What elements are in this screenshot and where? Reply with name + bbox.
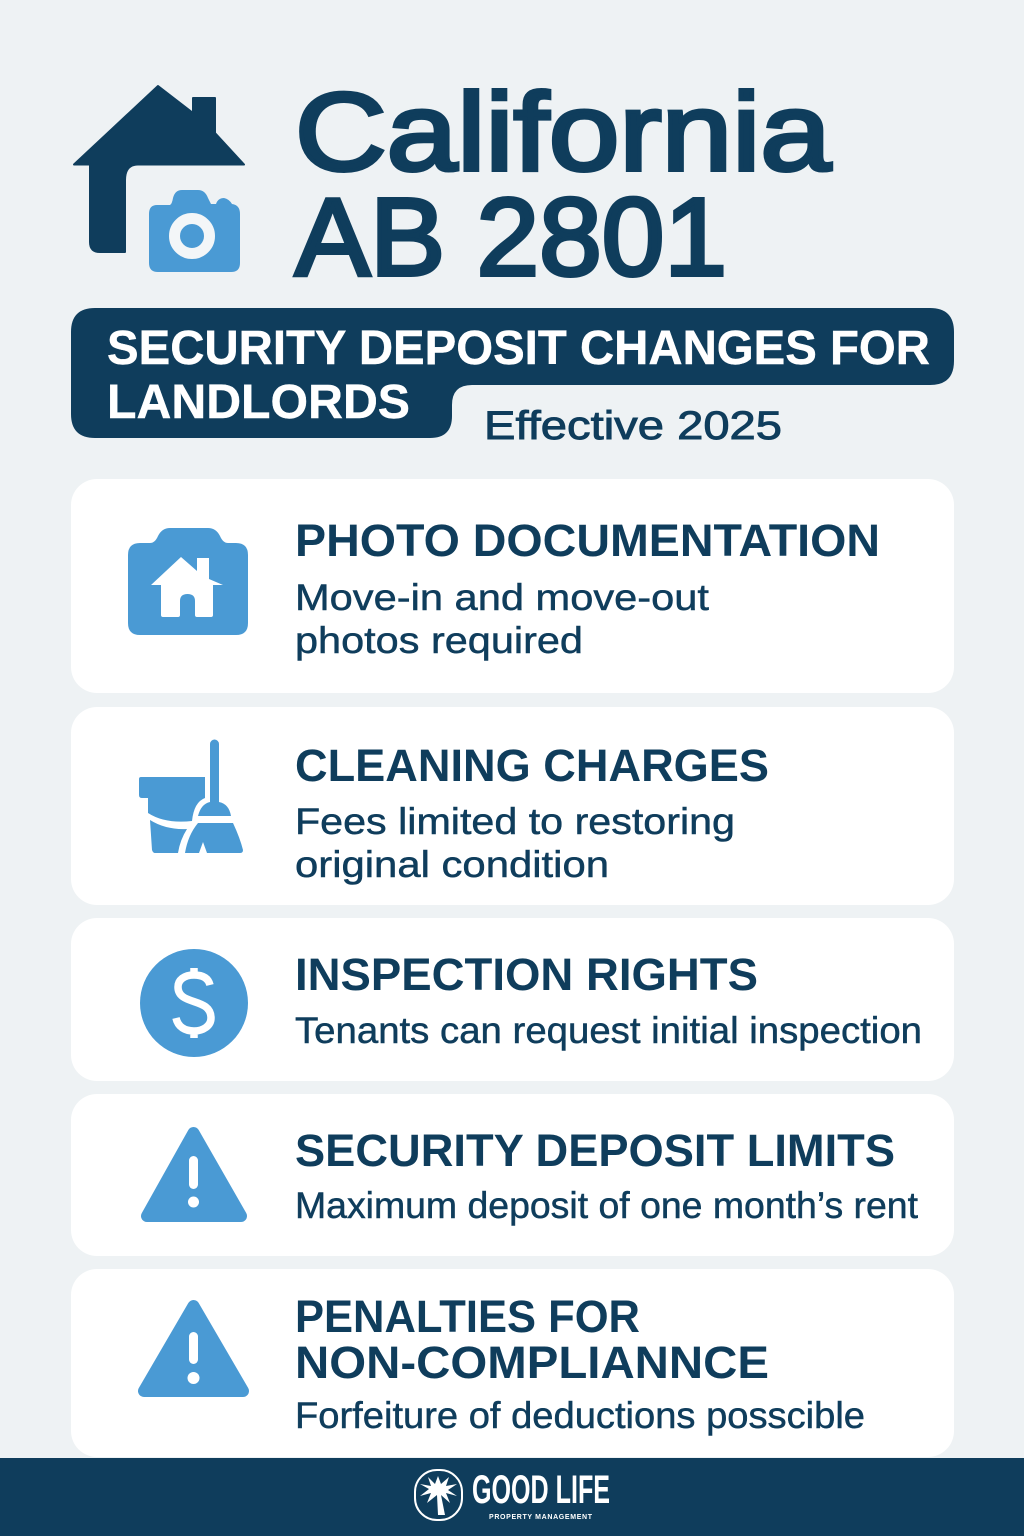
panel: inspection rights (71, 918, 954, 1081)
icon: warning triangle (144, 1306, 243, 1391)
panel: photo documentation: PHOTO DOCUMENTATION (295, 515, 880, 566)
panel: cleaning charges: CLEANING CHARGES (295, 740, 769, 791)
title (295, 71, 832, 299)
panel: penalties for non-compliance: PENALTIES FOR (295, 1291, 640, 1342)
logo wordmark: PROPERTY MANAGEMENT (489, 1514, 593, 1521)
panel: penalties for non-compliance (71, 1269, 954, 1457)
banner: security deposit changes: SECURITY DEPOSIT CHANGES FOR (107, 322, 930, 375)
header icon: house with camera (74, 86, 244, 272)
panel: cleaning charges (71, 707, 954, 905)
panel: inspection rights: INSPECTION RIGHTS (295, 949, 758, 1000)
panel: security deposit limits: Maximum deposit of one month’s rent (295, 1184, 919, 1226)
icon: palm tree logo (415, 1470, 462, 1520)
panel: security deposit limits: SECURITY DEPOSIT LIMITS (295, 1125, 895, 1176)
icon: bucket and broom (139, 740, 243, 853)
panel: inspection rights: Tenants can request initial inspection (295, 1009, 922, 1051)
panel: penalties for non-compliance: Forfeiture of deductions posscible (295, 1394, 865, 1436)
banner: security deposit changes (71, 308, 954, 438)
panel: cleaning charges: original condition (295, 843, 609, 885)
icon: warning triangle (147, 1133, 241, 1216)
footer bar (0, 1458, 1024, 1536)
panel: photo documentation: photos required (295, 619, 583, 661)
title: AB 2801 (295, 176, 727, 299)
logo wordmark (472, 1468, 610, 1521)
title: California (295, 71, 832, 194)
panel: cleaning charges: Fees limited to restoring (295, 800, 735, 842)
effective date: Effective 2025 (484, 404, 782, 448)
icon: camera with house (128, 528, 248, 635)
panel: security deposit limits (71, 1094, 954, 1256)
icon: dollar coin (140, 949, 248, 1057)
logo wordmark: GOOD LIFE (472, 1468, 610, 1512)
panel: photo documentation (71, 479, 954, 693)
panel: photo documentation: Move-in and move-out (295, 576, 710, 618)
banner: security deposit changes: LANDLORDS (107, 376, 410, 429)
panel: penalties for non-compliance: NON-COMPLIANNCE (295, 1337, 769, 1388)
